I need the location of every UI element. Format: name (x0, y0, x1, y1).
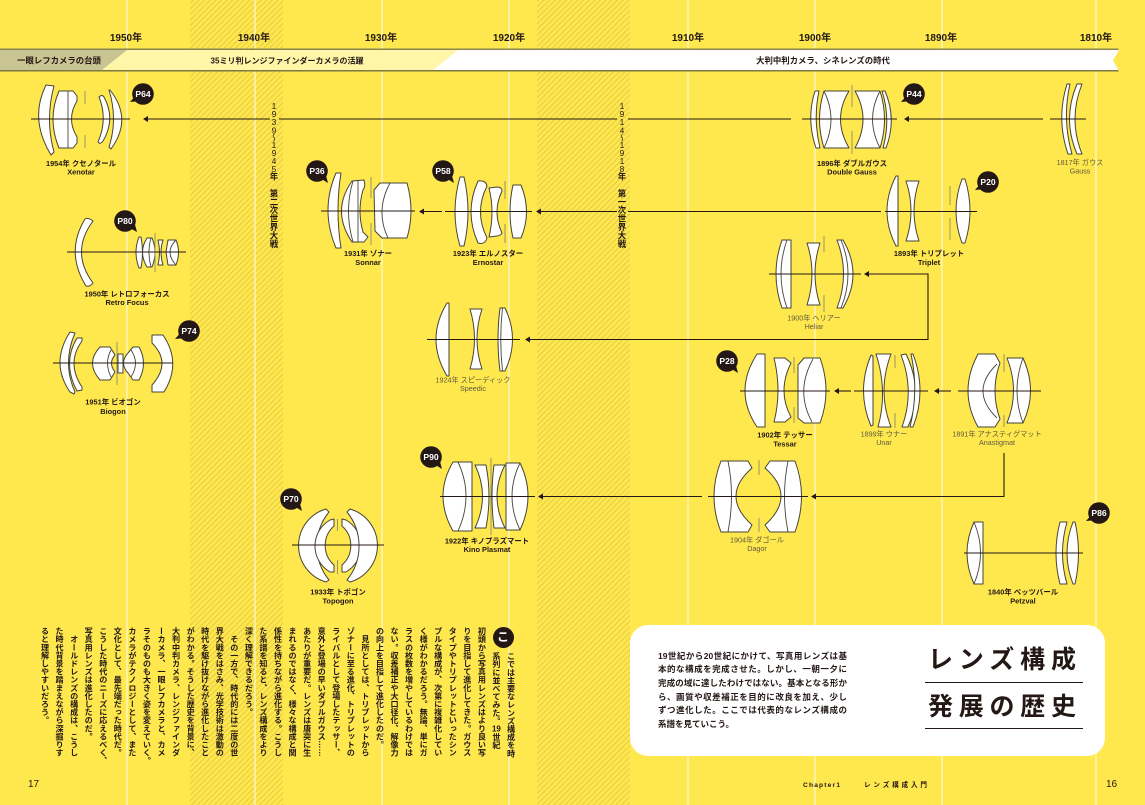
vertical body text: その一方で、時代的には二度の世 (230, 635, 239, 757)
lens: Xenotar 1954 (31, 85, 130, 176)
page number 17: 17 (28, 779, 39, 790)
vertical body text: りを目指して進化してきた。ガウス (463, 627, 472, 757)
timeline year labels: 1890年 (925, 31, 957, 44)
vertical body text: まれるのではなく、様々な構成と関 (288, 627, 297, 757)
page badge P44 (901, 83, 925, 105)
vertical body text: ーカメラ、一眼レフカメラと、カメ (157, 627, 166, 757)
lens: Xenotar 1954: 1954年 クセノタール (46, 159, 117, 168)
lens: Retro Focus 1950 (67, 218, 186, 307)
lens: Dagor 1904: 1904年 ダゴール (730, 536, 784, 544)
vertical body text: ラスの枚数を増やしているわけでは (405, 627, 414, 757)
page badge P70 (280, 488, 302, 511)
lens: Anastigmat 1891: 1891年 アナスティグマット (952, 430, 1042, 438)
vertical label: World War II: 1939〜1945 年 第二次世界大戦 (269, 101, 279, 248)
lens: Biogon 1951: 1951年 ビオゴン (85, 398, 141, 406)
vertical body text: ると理解しやすいだろう。 (40, 627, 50, 724)
lens: Kino Plasmat 1922: Kino Plasmat (464, 545, 511, 554)
vertical body text: 大判中判カメラ、レンジファインダ (172, 627, 181, 757)
page badge P36 (306, 160, 328, 183)
vertical body text: 文化として、最先端だった時代だ。 (113, 627, 122, 757)
drop cap (492, 626, 514, 648)
lens: Speedic 1924: 1924年 スピーディック (436, 376, 510, 384)
page badge P74 (175, 320, 200, 342)
page badge P70: P70 (283, 494, 299, 504)
lens: Petzval 1840: 1840年 ペッツバール (988, 588, 1059, 596)
era band (0, 48, 1119, 72)
lens: Ernostar 1923: Ernostar (473, 258, 503, 267)
lens: Unar 1899: Unar (876, 438, 892, 447)
lens: Ernostar 1923 (445, 177, 532, 267)
intro paragraph: 完成の域に達したわけではない。基本となる形か (658, 678, 847, 688)
vertical body text: あたりが重要だ。レンズは唐突に生 (303, 627, 312, 757)
era band: 35ミリ判レンジファインダーカメラの活躍 (211, 56, 363, 66)
lens: Biogon 1951 (53, 332, 173, 416)
lens: Tessar 1902 (740, 354, 830, 448)
vertical body text: ない。収差補正や大口径化、解像力 (390, 627, 399, 757)
lens: Topogon 1933: Topogon (322, 596, 354, 606)
lens: Topogon 1933: 1933年 トポゴン (310, 588, 366, 596)
vertical body text: 初頭から写真用レンズはより良い写 (477, 627, 486, 757)
lens: Biogon 1951: Biogon (100, 407, 126, 416)
lens: Xenotar 1954: Xenotar (67, 168, 95, 176)
timeline year labels: 1920年 (493, 31, 525, 44)
page badge P80: P80 (117, 216, 133, 226)
page badge P44: P44 (906, 89, 922, 99)
page badge P86: P86 (1091, 508, 1107, 518)
lens: Gauss 1817: 1817年 ガウス (1057, 158, 1103, 167)
arrow: Gauss to Double Gauss (904, 116, 1043, 122)
lens: Gauss 1817: Gauss (1070, 166, 1091, 176)
intro paragraph: 19世紀から20世紀にかけて、写真用レンズは基 (658, 650, 847, 660)
intro paragraph: ら、画質や収差補正を目的に改良を加え、少し (658, 692, 847, 702)
page badge P58 (432, 160, 454, 183)
lens: Dagor 1904 (708, 460, 808, 553)
lens: Topogon 1933 (292, 509, 384, 606)
vertical body text: の向上を目指して進化したのだ。 (375, 627, 384, 748)
running footer: chapter: Chapter1 (803, 782, 841, 789)
page number 16: 16 (1106, 779, 1117, 790)
page badge P28: P28 (719, 356, 735, 366)
lens: Heliar 1900: 1900年 ヘリアー (787, 314, 841, 322)
lens: Speedic 1924: Speedic (460, 384, 486, 393)
lens: Sonnar 1931: Sonnar (355, 258, 381, 267)
page badge P20 (975, 171, 999, 193)
lens: Kino Plasmat 1922 (440, 458, 535, 554)
intro paragraph: 本的な構成を完成させた。しかし、一朝一夕に (658, 664, 847, 674)
arrow: Unar to Tessar (834, 388, 851, 394)
vertical body text: た系譜を知ると、レンズ構成をより (259, 627, 268, 757)
arrow: Anastigmat branch to Dagor (811, 453, 1004, 500)
lens: Unar 1899: 1899年 ウナー (861, 430, 907, 438)
title line 2: 発展の歴史 (928, 693, 1076, 721)
timeline year labels: 1950年 (110, 31, 142, 44)
lens: Anastigmat 1891: Anastigmat (979, 438, 1015, 447)
vertical body text: カメラがテクノロジーとして、また (128, 627, 137, 757)
lens: Triplet 1893: Triplet (918, 258, 941, 267)
timeline year labels: 1810年 (1080, 31, 1112, 44)
lens: Double Gauss 1896 (802, 85, 897, 176)
lens: Gauss 1817 (1050, 84, 1103, 176)
vertical body text: た時代背景を踏まえながら深掘りす (55, 627, 64, 757)
running footer: section: レンズ構成入門 (864, 782, 927, 789)
lens: Double Gauss 1896: Double Gauss (827, 168, 877, 176)
page badge P64: P64 (135, 89, 151, 99)
vertical body text: ライバルとして登場したテッサー、 (332, 627, 341, 757)
vertical body text: 界大戦をはさみ、光学技術は激動の (215, 627, 224, 757)
vertical body text: こうした時代のニーズに応えるべく、 (99, 627, 108, 765)
vertical body text: プルな構成が、次第に複雑化してい (434, 627, 443, 757)
lens: Tessar 1902: 1902年 テッサー (757, 430, 813, 440)
lens: Sonnar 1931 (321, 173, 415, 267)
lens: Speedic 1924 (427, 303, 520, 393)
timeline year labels (110, 31, 1112, 44)
page badge P20: P20 (980, 177, 996, 187)
lens: Triplet 1893 (885, 176, 977, 267)
vertical body text: ラそのものも大きく姿を変えていく。 (142, 627, 151, 765)
vertical body text: 系列に並べてみた。 19 世紀 (492, 652, 501, 749)
arrow: Anastigmat to Unar (934, 388, 951, 394)
arrow: Ernostar to Sonnar (419, 208, 442, 214)
vertical body text: く様がわかるだろう。無論、単にガ (419, 627, 428, 757)
lens: Heliar 1900 (769, 236, 861, 331)
arrow: Double Gauss to Xenotar (143, 116, 791, 122)
vertical body text: 見所としては、トリプレットから (361, 635, 370, 757)
arrow: Dagor to Kino Plasmat (538, 494, 702, 500)
lens: Triplet 1893: 1893年 トリプレット (894, 249, 964, 258)
lens: Anastigmat 1891 (952, 354, 1042, 447)
timeline year labels: 1910年 (672, 31, 704, 44)
vertical body text: 係性を持ちながら進化する。こうし (274, 627, 282, 757)
lens: Heliar 1900: Heliar (805, 322, 824, 331)
lens: Ernostar 1923: 1923年 エルノスター (453, 249, 523, 258)
lens: Double Gauss 1896: 1896年 ダブルガウス (817, 159, 887, 168)
vertical body text: 時代を駆け抜けながら進化したこと (201, 627, 210, 757)
page badge P90 (420, 446, 442, 469)
lens: Unar 1899 (854, 354, 928, 447)
page badge P74: P74 (181, 326, 197, 336)
vertical body text: ゾナーに至る進化、トリプレットの (346, 627, 355, 757)
title line 1: レンズ構成 (928, 646, 1076, 674)
lens: Kino Plasmat 1922: 1922年 キノプラズマート (445, 536, 529, 546)
vertical label: World War I: 1914〜1918 年 第一次世界大戦 (617, 101, 627, 248)
page badge P86 (1086, 502, 1110, 524)
drop cap: こ (497, 630, 509, 644)
vertical body text: オールドレンズの構成は、こうし (70, 635, 79, 757)
vertical body text: 深く理解できるだろう。 (244, 627, 253, 716)
panel: title and intro (630, 625, 1105, 756)
timeline year labels: 1940年 (238, 31, 270, 44)
intro paragraph (658, 650, 847, 729)
vertical body text: がわかる。そうした歴史を背景に、 (186, 627, 195, 757)
timeline year labels: 1930年 (365, 31, 397, 44)
intro paragraph: 系譜を見ていこう。 (658, 719, 734, 729)
lens: Dagor 1904: Dagor (747, 544, 767, 553)
vertical body text: 意外と登場の早いダブルガウス…… (317, 627, 326, 757)
vertical body text: 写真用レンズは進化したのだ。 (84, 627, 93, 740)
page badge P80 (114, 210, 137, 232)
lens: Petzval 1840: Petzval (1010, 596, 1036, 606)
page badge P64 (130, 83, 154, 105)
arrow: Triplet to Ernostar (536, 208, 881, 214)
intro paragraph: ずつ進化した。ここでは代表的なレンズ構成の (658, 705, 847, 715)
page badge P28 (716, 350, 738, 373)
vertical body text: タイプやトリプレットといったシン (448, 627, 457, 757)
arrow: Heliar to Triplet branch line (525, 271, 928, 342)
lens: Retro Focus 1950: Retro Focus (105, 298, 149, 307)
timeline year labels: 1900年 (799, 31, 831, 44)
lens: Retro Focus 1950: 1950年 レトロフォーカス (84, 290, 170, 298)
lens: Petzval 1840 (964, 522, 1083, 606)
lens: Tessar 1902: Tessar (773, 440, 797, 448)
page badge P58: P58 (435, 166, 451, 176)
vertical body text (40, 626, 516, 765)
page badge P36: P36 (309, 166, 325, 176)
era band: 一眼レフカメラの台頭 (17, 56, 101, 66)
era band: 大判中判カメラ、シネレンズの時代 (756, 56, 890, 66)
lens: Sonnar 1931: 1931年 ゾナー (344, 249, 392, 258)
vertical body text: こでは主要なレンズ構成を時 (506, 652, 516, 757)
page badge P90: P90 (423, 452, 439, 462)
